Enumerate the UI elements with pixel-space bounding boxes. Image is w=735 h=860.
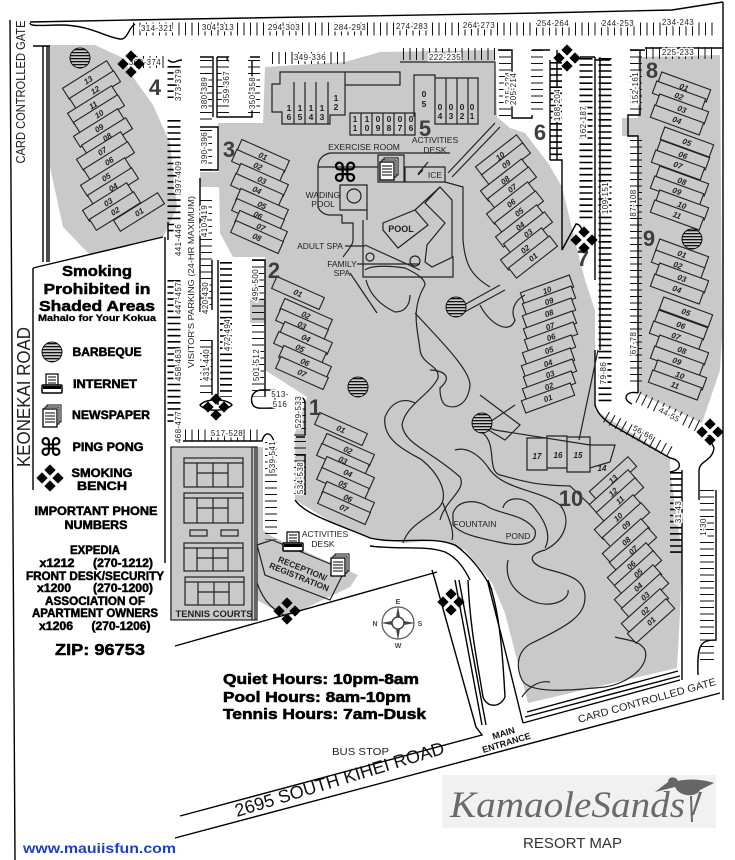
parking stall number labels: 254-264: [537, 19, 569, 28]
building number labels: 3: [223, 137, 235, 162]
parking stall number labels: 501-512: [252, 349, 261, 381]
building 5: 3: [320, 112, 325, 122]
parking stall number labels: 397-409: [174, 161, 183, 193]
important phone numbers: NUMBERS: [64, 518, 128, 532]
reception building: REGISTRATION: [268, 560, 331, 593]
parking stall number labels: [129, 18, 708, 536]
building 1: 02: [342, 445, 354, 457]
building 5: 1: [298, 103, 303, 113]
building 5: 0: [376, 114, 381, 124]
building 9: 07: [670, 331, 682, 342]
building 5: 6: [409, 123, 414, 133]
building 1: 05: [337, 479, 349, 491]
building 3: [231, 139, 289, 254]
building 2: 03: [296, 320, 308, 332]
parking stall number labels: 162-187: [579, 106, 588, 138]
building 5: 0: [387, 114, 392, 124]
smoking notice: Smoking: [62, 263, 132, 280]
building 1: 07: [338, 503, 350, 515]
building 4: 12: [89, 84, 102, 97]
building 10: 09: [620, 519, 633, 532]
building 9: 06: [675, 320, 687, 331]
building 10: 03: [639, 590, 652, 603]
building 6: 02: [519, 243, 532, 256]
building 10: 10: [612, 511, 625, 524]
legend label: smoking bench: SMOKING: [72, 466, 132, 480]
building 4: [63, 61, 164, 231]
building 10: [527, 436, 675, 643]
building 4: 08: [101, 131, 114, 144]
building 1: 01: [335, 424, 347, 436]
map text labels: FAMILY: [327, 259, 357, 269]
building 8: 02: [673, 91, 685, 102]
legend label: newspaper: NEWSPAPER: [72, 408, 150, 422]
map text labels: ACTIVITIES: [302, 529, 348, 539]
parking stall number labels: 368-374: [129, 58, 161, 67]
building 4: 01: [133, 206, 146, 219]
parking stall number labels: 215-224: [504, 72, 513, 104]
building 5: 0: [422, 89, 427, 99]
parking stall number labels: 109-151: [601, 182, 610, 214]
important phone numbers: ZIP: 96753: [55, 642, 145, 659]
building 6: 03: [522, 227, 535, 240]
building 4: 09: [93, 122, 106, 135]
building 10: 13: [607, 473, 620, 486]
parking stall number labels: 304-313: [202, 23, 234, 32]
icon: ping pong: ⌘: [39, 433, 63, 462]
legend label: internet: INTERNET: [73, 377, 138, 391]
building 10: 17: [533, 452, 542, 461]
icon: internet: [42, 374, 62, 393]
hours: Quiet Hours: 10pm-8am: [223, 671, 419, 688]
building 4: 11: [87, 99, 100, 111]
important phone numbers: (270-1200): [93, 583, 153, 595]
hours: Pool Hours: 8am-10pm: [223, 689, 411, 706]
building 2: 04: [300, 333, 312, 345]
parking stall number labels: 1-30: [699, 518, 708, 536]
building number labels: 4: [149, 75, 162, 100]
reception building: RECEPTION/: [277, 554, 329, 583]
building number labels: 10: [559, 486, 583, 511]
parking stall number labels: 529-533: [294, 396, 303, 428]
parking stall number labels: 274-283: [396, 22, 428, 31]
map text labels: POOL: [388, 224, 414, 234]
building 1: 03: [337, 455, 349, 467]
building 8: 05: [681, 137, 693, 148]
parking stall number labels: 284-293: [334, 23, 366, 32]
building 6: 09: [500, 158, 513, 171]
important phone numbers: FRONT DESK/SECURITY: [26, 571, 164, 583]
map text labels: FOUNTAIN: [454, 519, 496, 529]
building 5: 0: [398, 114, 403, 124]
building 8: 04: [671, 115, 683, 126]
building 7: 06: [545, 332, 557, 343]
compass: S: [418, 621, 423, 628]
building 4: 13: [82, 74, 95, 87]
parking stall number labels: 359-367: [222, 71, 231, 103]
building 2: 07: [296, 368, 308, 380]
building 7: 10: [541, 285, 553, 296]
building 7: 02: [543, 381, 555, 392]
building 5: 1: [353, 114, 358, 124]
building 3: 06: [252, 210, 264, 222]
building number labels: 1: [309, 395, 321, 420]
parking stall number labels: 205-214: [509, 73, 518, 105]
parking stall number labels: 410-419: [200, 205, 209, 237]
road label: card controlled gate west: CARD CONTROLLED GATE: [13, 20, 28, 164]
building 7: 03: [544, 369, 556, 380]
building 8: 11: [671, 210, 683, 221]
building 9: 03: [676, 273, 688, 284]
parking stall number labels: 67-78: [629, 332, 638, 354]
building 4: 05: [100, 171, 113, 184]
smoking notice: Prohibited in: [44, 281, 150, 298]
parking stall number labels: 264-273: [463, 21, 495, 30]
important phone numbers: x1206: [39, 621, 73, 633]
reception building: [257, 540, 345, 617]
building 5: 7: [398, 123, 403, 133]
building 4: 10: [93, 108, 106, 121]
building 5: 2: [460, 111, 465, 121]
building 5: 0: [449, 102, 454, 112]
building 5: 1: [287, 103, 292, 113]
parking stall number labels: 373-379: [174, 69, 183, 101]
building 5: 0: [409, 114, 414, 124]
legend label: barbeque: BARBEQUE: [72, 345, 142, 359]
building 5: 4: [309, 112, 314, 122]
parking stall number labels: 390-396: [200, 132, 209, 164]
building 3: 01: [257, 151, 269, 163]
parking stall number labels: 152-161: [631, 72, 640, 104]
building 8: 07: [672, 160, 684, 171]
building 3: 04: [251, 185, 263, 197]
parking stall number labels: 244-253: [602, 19, 634, 28]
parking stall number labels: 294-303: [268, 23, 300, 32]
parking stall number labels: 380-389: [200, 77, 209, 109]
parking stall number labels: 188-204: [553, 89, 562, 121]
building 10: 07: [627, 544, 640, 557]
parking stall number labels: 31-43: [674, 501, 683, 523]
building number labels: [149, 58, 658, 511]
building number labels: 9: [643, 226, 655, 251]
important phone numbers: [26, 504, 164, 659]
map text labels: ACTIVITIES: [412, 135, 458, 145]
building 7: 07: [544, 321, 556, 332]
legend label: bench: BENCH: [77, 479, 127, 493]
building number labels: 6: [534, 120, 546, 145]
building 8: [650, 72, 714, 230]
legend: [36, 342, 150, 493]
building 2: 01: [292, 288, 304, 300]
building 1: 06: [342, 493, 354, 505]
building 2: [272, 276, 332, 390]
building 5: [272, 62, 495, 135]
building 2: 06: [299, 357, 311, 369]
building 8: 10: [676, 200, 688, 211]
important phone numbers: ASSOCIATION OF: [45, 596, 145, 608]
parking stall number labels: 447-457: [174, 282, 183, 314]
road label: Keonekai Road: KEONEKAI ROAD: [14, 327, 34, 467]
building 10: 06: [625, 559, 638, 572]
parking stall number labels: 79-86: [599, 362, 608, 384]
building 9: 08: [676, 345, 688, 356]
building 9: 05: [680, 307, 692, 318]
tennis courts: [171, 447, 257, 620]
resort map caption: RESORT MAP: [523, 836, 622, 852]
icon: newspaper: [43, 405, 61, 427]
smoking notice: Mahalo for Your Kokua: [38, 313, 157, 323]
shaded non-smoking areas: [50, 45, 722, 703]
building 10: 11: [614, 494, 627, 506]
parking stall number labels: 495-500: [251, 269, 260, 301]
building 5: 9: [376, 123, 381, 133]
compass: N: [372, 621, 378, 628]
smoking notice: [38, 263, 157, 323]
legend label: ping pong: PING PONG: [72, 440, 144, 454]
icon: smoking bench: [36, 464, 64, 492]
building 6: [476, 135, 557, 278]
building 5: 6: [287, 112, 292, 122]
road label: South Kihei Road: 2695 SOUTH KIHEI ROAD: [232, 738, 447, 821]
building 10: 01: [645, 615, 658, 628]
bus stop label: BUS STOP: [332, 746, 389, 758]
building 10: 12: [607, 486, 620, 499]
parking stall number labels: 349-336: [294, 53, 326, 62]
amenity icons on map: ⌘: [332, 158, 358, 189]
building 5: 3: [449, 111, 454, 121]
hours: Tennis Hours: 7am-Dusk: [223, 706, 427, 723]
building 5: 1: [470, 111, 475, 121]
building number labels: 8: [646, 58, 658, 83]
building 7: 05: [543, 345, 555, 356]
building 10: 08: [620, 535, 633, 548]
logo: [442, 775, 716, 828]
parking stall number labels: 234-243: [662, 18, 694, 27]
building 5: 1: [309, 103, 314, 113]
building 6: 01: [527, 251, 540, 264]
website url: www.mauiisfun.com: [22, 840, 176, 856]
building 4: 07: [96, 145, 109, 158]
building 5: 1: [353, 123, 358, 133]
building number labels: 2: [268, 258, 280, 283]
parking stall number labels: 472-494: [223, 319, 232, 351]
smoking notice: Shaded Areas: [39, 298, 155, 315]
map text labels: SPA: [334, 268, 351, 278]
building 5: 1: [334, 93, 339, 103]
building 2: 05: [294, 343, 306, 355]
compass: E: [396, 599, 401, 606]
building 5: 2: [334, 102, 339, 112]
parking stall number labels: 44-55: [657, 406, 681, 424]
building 5: 8: [387, 123, 392, 133]
important phone numbers: x1200: [37, 583, 71, 595]
building 5: 0: [470, 102, 475, 112]
building 4: 04: [107, 181, 120, 194]
compass: W: [395, 643, 402, 650]
building 6: 07: [506, 182, 519, 195]
main entrance label: MAIN: [491, 725, 516, 741]
map text labels: ICE: [428, 170, 442, 180]
parking stall number labels: 539-541: [268, 441, 277, 473]
building 8: 08: [676, 176, 688, 187]
building 3: 08: [251, 232, 263, 244]
building 5: 1: [365, 114, 370, 124]
building 3: 05: [256, 200, 268, 212]
parking stall number labels: 431-440: [202, 349, 211, 381]
compass: [372, 599, 423, 650]
hours: [223, 671, 427, 723]
parking stall ticks: [130, 29, 716, 665]
building 9: 09: [671, 356, 683, 367]
building 3: 07: [255, 222, 267, 234]
building 7: 04: [542, 358, 554, 369]
parking stall number labels: 468-477: [174, 411, 183, 443]
parking stall number labels: 225-233: [662, 48, 694, 57]
building number labels: 5: [419, 116, 431, 141]
building 7: [520, 275, 578, 413]
parking stall number labels: 222-235: [429, 53, 461, 62]
important phone numbers: x1212: [40, 558, 74, 570]
building 2: 02: [300, 310, 312, 322]
building 5: 1: [320, 103, 325, 113]
parking stall number labels: 517-528: [211, 429, 243, 438]
parking stall number labels: 350-358: [248, 77, 257, 109]
map text labels: POND: [506, 531, 530, 541]
parking stall number labels: 534-538: [296, 462, 305, 494]
parking stall number labels: 420-430: [201, 282, 210, 314]
building 5: 0: [365, 123, 370, 133]
important phone numbers: APARTMENT OWNERS: [32, 608, 158, 620]
map text labels: DESK: [311, 539, 335, 549]
important phone numbers: IMPORTANT PHONE: [34, 504, 158, 518]
logo: KamaoleSands: [449, 785, 685, 826]
building 3: 03: [256, 175, 268, 187]
map text labels: WADING: [306, 190, 340, 200]
building 8: 06: [677, 150, 689, 161]
central paths and streams: [318, 123, 646, 697]
building 9: [648, 239, 713, 400]
building 9: 10: [674, 370, 686, 381]
building 5: 5: [298, 112, 303, 122]
parking stall number labels: 513-: [271, 390, 289, 399]
building number labels: 7: [577, 246, 589, 271]
visitor's parking label: VISITOR'S PARKING (24-HR MAXIMUM): [187, 196, 196, 368]
building 8: 09: [671, 186, 683, 197]
building 1: [315, 412, 374, 525]
building 6: 04: [514, 220, 527, 233]
building 9: 04: [671, 284, 683, 295]
main entrance label: ENTRANCE: [481, 731, 532, 755]
building 7: 08: [543, 308, 555, 319]
road label: card controlled gate south: CARD CONTROLLED GATE: [577, 676, 718, 726]
building 4: 02: [109, 205, 122, 218]
building 4: 06: [103, 155, 116, 168]
building 6: 10: [494, 150, 507, 163]
main entrance label: [478, 721, 532, 755]
building 6: 05: [513, 206, 526, 219]
parking stall number labels: 56-66: [631, 424, 655, 442]
map text labels: ADULT SPA: [297, 241, 343, 251]
building 8: 03: [676, 104, 688, 115]
parking stall number labels: 458-463: [174, 349, 183, 381]
building 5: 0: [438, 102, 443, 112]
parking stall number labels: 314-321: [141, 24, 173, 33]
building 10: 14: [598, 464, 607, 473]
map text labels: EXERCISE ROOM: [328, 142, 400, 152]
important phone numbers: EXPEDIA: [70, 545, 120, 557]
building 5: 4: [438, 111, 443, 121]
important phone numbers: (270-1212): [93, 558, 153, 570]
building 8: 01: [678, 82, 690, 93]
building 10: 04: [632, 581, 645, 594]
building 3: 02: [252, 161, 264, 173]
building 9: 01: [676, 249, 688, 260]
map text labels: DESK: [423, 145, 447, 155]
building 10: 15: [574, 451, 583, 460]
building 10: 02: [639, 605, 652, 618]
parking stall number labels: 87-108: [629, 189, 638, 217]
map text labels: [297, 135, 530, 549]
building 6: 08: [499, 174, 512, 187]
building 7: 01: [542, 393, 554, 404]
parking stall number labels: 441-446: [174, 224, 183, 256]
parking stall number labels: 516: [273, 400, 287, 409]
building 5: 0: [460, 102, 465, 112]
building 1: 04: [342, 468, 354, 480]
building 10: 16: [554, 451, 563, 460]
building 10: 05: [632, 567, 645, 580]
building 6: 06: [505, 197, 518, 210]
building 9: 11: [669, 380, 681, 391]
building 5: 5: [422, 99, 427, 109]
building 9: 02: [672, 260, 684, 271]
building 4: 03: [102, 196, 115, 209]
icon: barbeque: [42, 342, 62, 362]
important phone numbers: (270-1206): [92, 621, 151, 633]
amenity icons on map: [70, 44, 724, 625]
building 7: 09: [543, 296, 555, 307]
tennis courts: TENNIS COURTS: [176, 609, 252, 620]
map text labels: POOL: [311, 199, 335, 209]
